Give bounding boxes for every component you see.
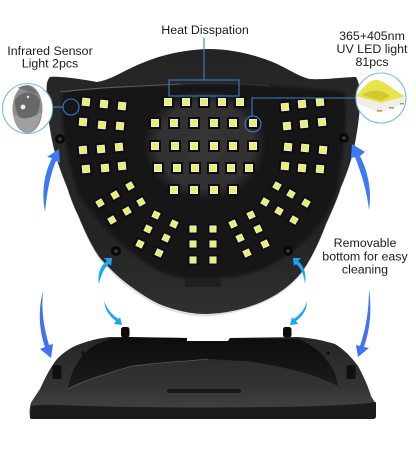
removable base — [30, 327, 376, 419]
central lighter circle — [145, 91, 265, 199]
callout: heat dissipation box — [169, 38, 239, 96]
label: UV LED: UV LED light — [337, 42, 408, 56]
callout: infrared sensor — [2, 84, 79, 134]
heading: heat dissipation: Heat Disspation — [161, 23, 249, 37]
arrow: large right down — [356, 289, 370, 357]
heat vents — [182, 87, 217, 89]
label: infrared sensor: Infrared Sensor — [7, 44, 93, 58]
screws — [55, 133, 349, 256]
label: removable bottom: bottom for easy — [322, 249, 408, 263]
lamp body — [47, 49, 360, 316]
label: UV LED: 365+405nm — [339, 29, 405, 43]
arrow: large left up — [43, 149, 60, 212]
arrow: large right up — [351, 144, 370, 210]
arrow: small right down — [290, 301, 307, 325]
callout: UV LED chip — [245, 73, 406, 132]
arrow: small left up — [98, 258, 112, 284]
arrow: large left down — [40, 291, 53, 358]
LED array: 81 beads — [76, 95, 330, 265]
inner recessed area — [62, 84, 346, 278]
label: UV LED: 81pcs — [355, 55, 389, 69]
arrow: small left down — [104, 301, 122, 325]
label: removable bottom: Removable — [334, 236, 396, 250]
label: removable bottom: cleaning — [342, 263, 388, 277]
label: infrared sensor: Light 2pcs — [22, 56, 78, 70]
arrow: small right up — [293, 258, 306, 284]
